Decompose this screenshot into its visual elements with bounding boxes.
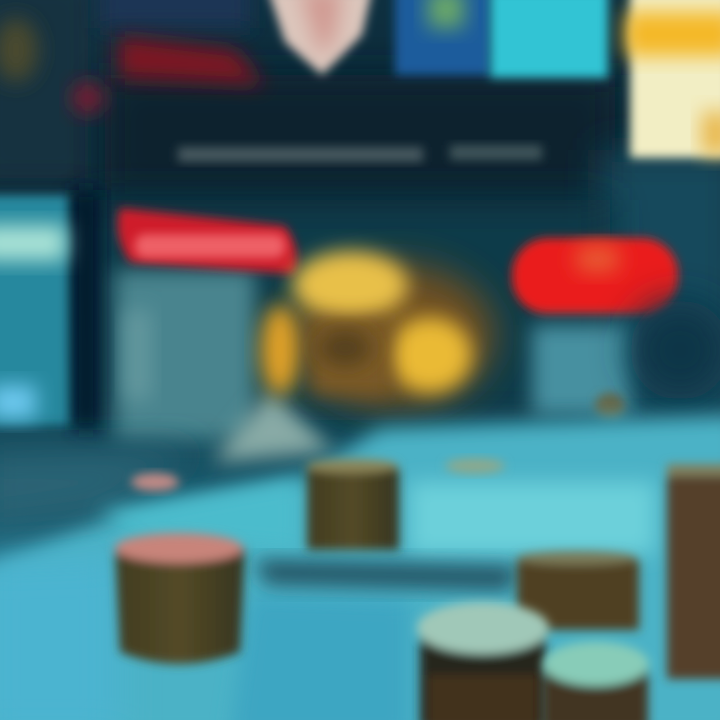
left glowing panel [0,195,68,425]
cup: left front with pink lid [115,533,245,664]
upper street backdrop [0,0,720,430]
teal post under pill [532,300,720,419]
cup: centre back [306,459,399,550]
grey building [115,270,335,462]
cup: far right [667,464,720,679]
yellow glowing window [260,251,495,407]
red pill sign right [512,238,678,314]
turquoise table [0,415,720,720]
blurred grey sign lettering [178,145,542,162]
billboards along the top [100,0,720,158]
cup: front centre with pale lid [417,602,549,720]
cup: front right with pale lid [542,642,649,720]
cup: right middle [517,551,639,630]
red sign left [118,208,297,274]
